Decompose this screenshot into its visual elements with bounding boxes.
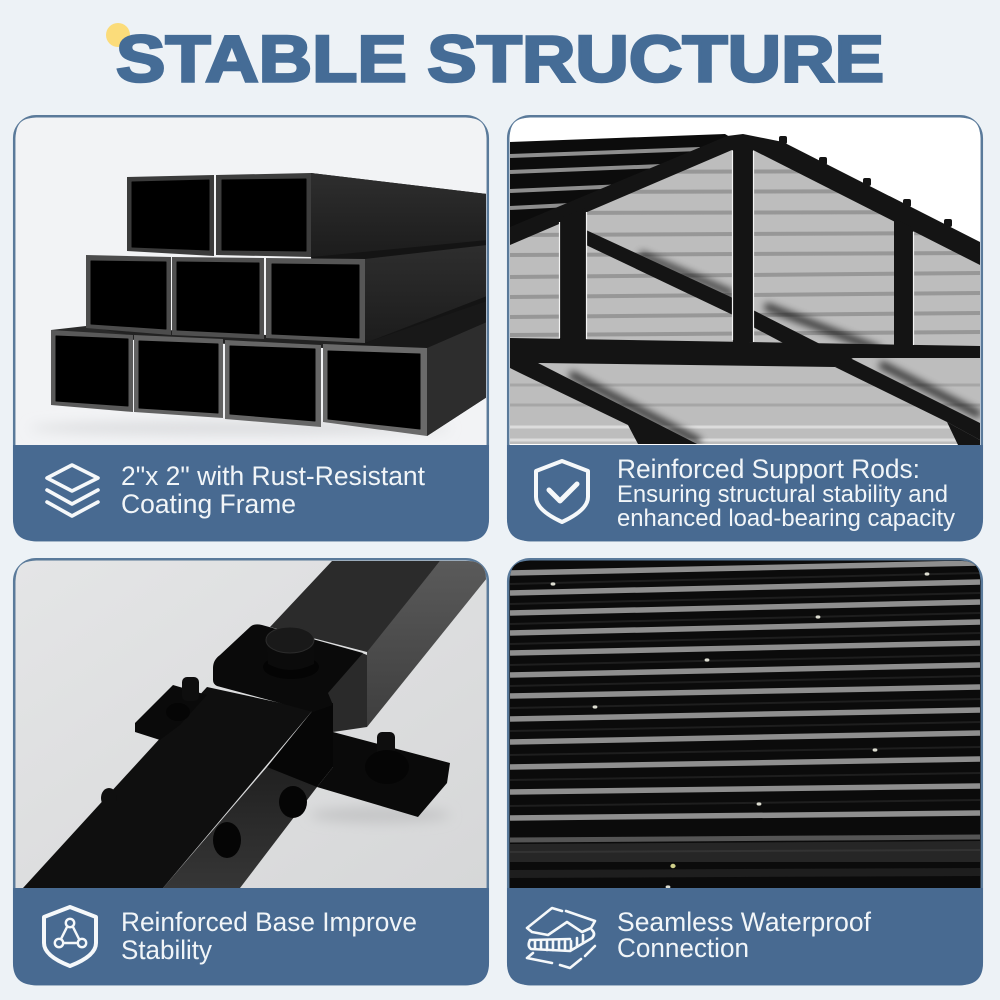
ridge fasteners	[779, 136, 952, 227]
tube faces	[23, 561, 487, 888]
title text: STABLE STRUCTURE	[116, 22, 884, 96]
panel: reinforced base	[13, 559, 489, 985]
caption text: 2"x 2" with Rust-Resistant	[121, 461, 425, 491]
truss beams	[510, 134, 980, 445]
icon: sandwich roof panel	[527, 908, 595, 968]
caption text: Connection	[617, 933, 749, 963]
caption text: Seamless Waterproof	[617, 907, 871, 937]
roof sheets behind the ridge	[510, 134, 728, 227]
icon: stacked layers	[47, 465, 98, 516]
caption text: Reinforced Base Improve	[121, 907, 417, 937]
icon: shield with triangle nodes	[44, 907, 96, 966]
panel card	[508, 559, 982, 984]
photo: corrugated roof panels	[510, 561, 980, 889]
panel: reinforced support rods	[507, 116, 983, 541]
caption text	[121, 907, 417, 965]
caption band	[13, 445, 489, 541]
caption text	[617, 454, 955, 532]
icon: yellow accent dot	[106, 23, 130, 47]
panel card	[14, 559, 488, 984]
photo: bracket bolted on square tube	[16, 561, 487, 888]
caption text: Coating Frame	[121, 489, 296, 519]
caption band	[13, 888, 489, 985]
flanges	[135, 685, 450, 817]
title with yellow accent dot	[106, 22, 884, 96]
caption text	[121, 461, 425, 519]
small bolts	[101, 677, 409, 858]
caption text	[617, 907, 871, 963]
photo: stack of square tubes	[16, 118, 487, 445]
panel: seamless waterproof roof	[507, 559, 983, 985]
panel: rust-resistant frame tubes	[13, 116, 489, 541]
photo: roof truss from below	[510, 118, 980, 445]
caption text: enhanced load-bearing capacity	[617, 505, 955, 532]
caption text: Reinforced Support Rods:	[617, 454, 920, 484]
caption text: Ensuring structural stability and	[617, 481, 948, 508]
caption text: Stability	[121, 935, 212, 965]
large bolt	[266, 628, 314, 654]
roof screws	[551, 572, 929, 889]
panel card	[508, 116, 982, 540]
caption band	[507, 445, 983, 541]
caption band	[507, 888, 983, 985]
thin white highlights on posts	[560, 151, 914, 345]
U saddle	[213, 624, 363, 787]
icon: shield with check	[536, 461, 588, 522]
panel card	[14, 116, 488, 540]
